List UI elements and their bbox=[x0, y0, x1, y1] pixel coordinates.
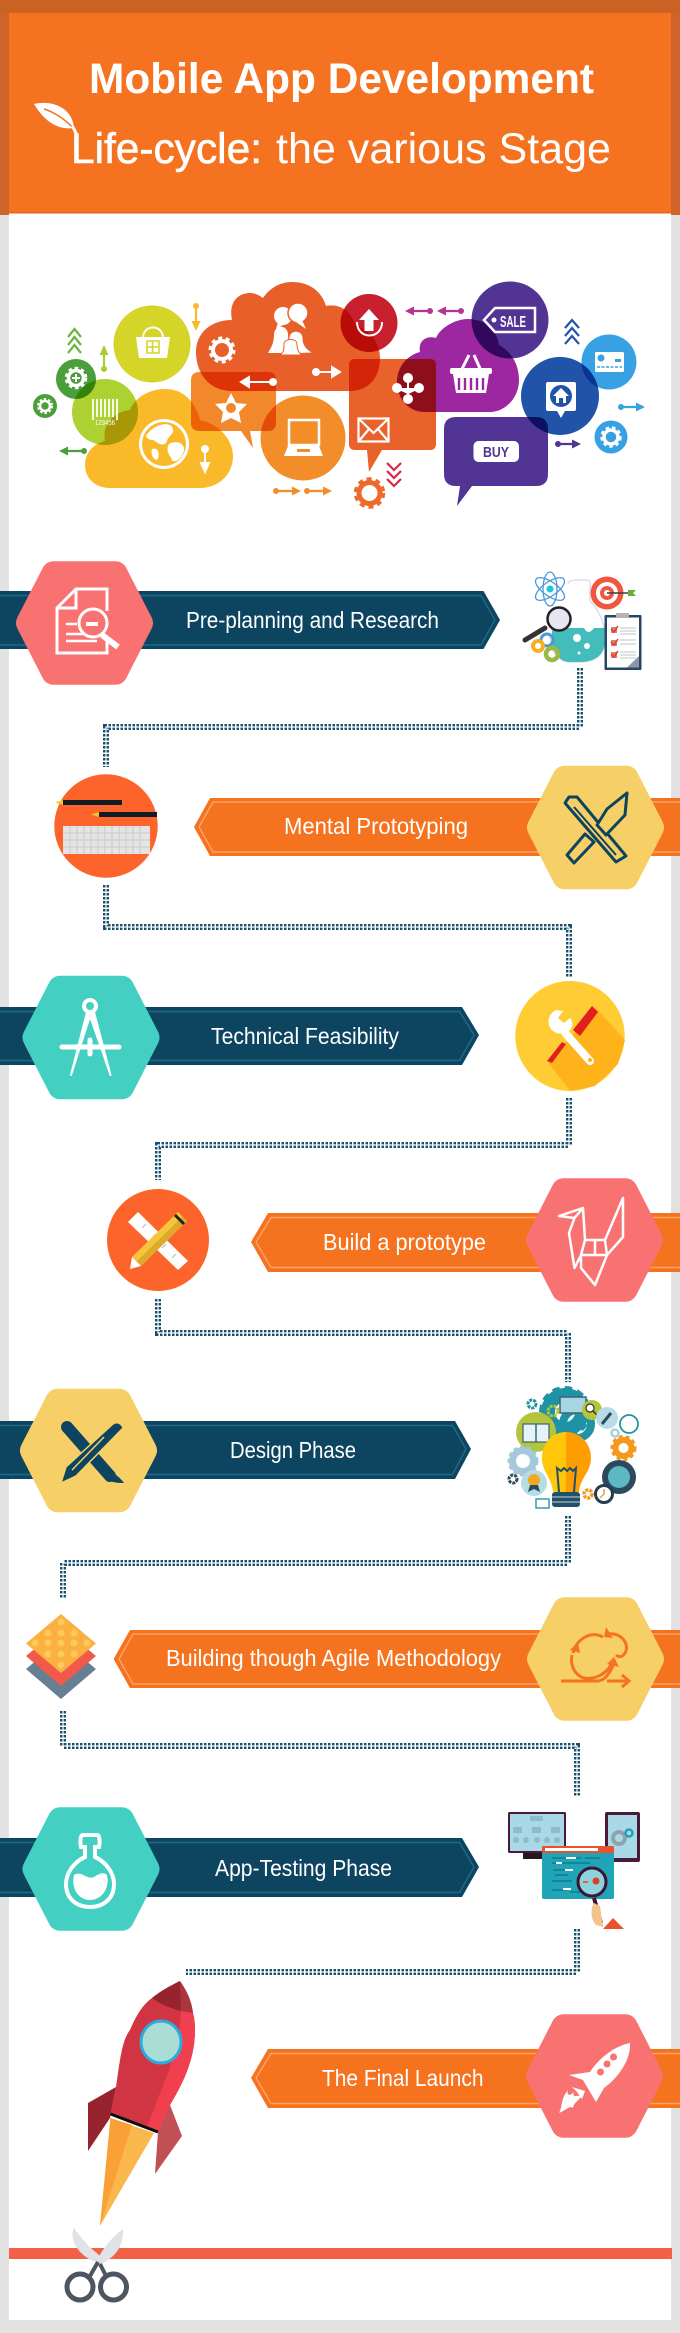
icon: blue gear bbox=[602, 428, 620, 446]
icon: envelope bbox=[358, 418, 388, 442]
icon: purple basket bbox=[450, 355, 492, 393]
hexagon: pencil and ruler bbox=[539, 778, 652, 877]
banner: app-testing phase bbox=[0, 1838, 479, 1897]
header banner bbox=[0, 0, 680, 215]
heading: the final launch: The Final Launch bbox=[322, 2065, 484, 2091]
title: Mobile App Development bbox=[89, 55, 594, 103]
decorative arrowheads bbox=[59, 303, 645, 496]
heading: technical feasibility: Technical Feasibility bbox=[211, 1023, 399, 1049]
illustration: bug testing screens bbox=[508, 1812, 640, 1929]
icon: gear in cloud bbox=[210, 338, 234, 362]
step 7: app-testing phase bbox=[0, 1812, 640, 1929]
banner: build a prototype bbox=[251, 1213, 680, 1272]
icon: orange gear bbox=[356, 479, 384, 507]
hexagon: rocket bbox=[538, 2026, 651, 2126]
icon: people bbox=[268, 303, 313, 355]
icon: star bbox=[215, 393, 247, 423]
icon: buy label bbox=[474, 441, 519, 462]
icon: buy label: BUY bbox=[483, 444, 509, 461]
icon: scissors bbox=[67, 2228, 126, 2300]
hexagon: research document bbox=[28, 573, 141, 673]
hexagon: origami crane bbox=[538, 1190, 651, 1290]
step 6: building through agile methodology bbox=[26, 1609, 680, 1709]
hexagon: pencil and brush bbox=[32, 1401, 145, 1500]
banner: agile methodology bbox=[114, 1630, 680, 1688]
illustration: wrench and screwdriver bbox=[515, 981, 625, 1091]
illustration: stacked layers bbox=[26, 1614, 96, 1699]
step 2: mental prototyping bbox=[54, 774, 680, 878]
step 1: pre-planning and research bbox=[0, 572, 642, 673]
icon: card bbox=[595, 352, 624, 372]
illustration: keyboard and pencils bbox=[54, 774, 158, 878]
cloud and bubble shapes bbox=[33, 282, 636, 506]
icon: leaf bbox=[34, 103, 77, 140]
banner: the final launch bbox=[251, 2049, 680, 2108]
icon: research cluster bbox=[525, 572, 642, 670]
icon: sale tag bbox=[484, 308, 535, 332]
step 8: the final launch bbox=[9, 1981, 680, 2300]
hexagon: compass bbox=[34, 988, 148, 1087]
connector 1 bbox=[106, 668, 580, 767]
icon: globe bbox=[139, 419, 189, 469]
banner: technical feasibility bbox=[0, 1007, 479, 1065]
connector 6 bbox=[63, 1711, 577, 1796]
icon: house pin bbox=[546, 382, 576, 418]
connector 7 bbox=[186, 1929, 577, 1972]
icon: shopping basket bbox=[136, 328, 170, 358]
connector 4 bbox=[158, 1299, 568, 1382]
banner: design phase bbox=[0, 1421, 471, 1479]
icon: barcode bbox=[93, 399, 117, 427]
connector 5 bbox=[63, 1516, 568, 1599]
title: the various Stage bbox=[276, 125, 611, 173]
icon: upload bbox=[357, 309, 382, 336]
title bbox=[71, 55, 611, 173]
icon: laptop bbox=[284, 420, 323, 456]
title: Life-cycle: bbox=[71, 125, 262, 173]
banner: mental prototyping bbox=[194, 798, 680, 856]
illustration: lightbulb and gears bbox=[509, 1389, 638, 1508]
step 3: technical feasibility bbox=[0, 981, 625, 1091]
banner: pre-planning bbox=[0, 591, 500, 649]
connector 2 bbox=[106, 885, 569, 977]
icon: white arrows bbox=[201, 367, 340, 472]
heading: building though agile methodology: Building though Agile Methodology bbox=[166, 1645, 501, 1671]
illustration: ruler and pencil bbox=[107, 1189, 209, 1291]
heading: build a prototype: Build a prototype bbox=[323, 1229, 486, 1255]
heading: app-testing phase: App-Testing Phase bbox=[215, 1855, 392, 1881]
heading: design phase: Design Phase bbox=[230, 1437, 356, 1463]
icon: sale tag: SALE bbox=[500, 314, 526, 331]
ribbon bbox=[9, 2248, 672, 2259]
icon: green gears bbox=[38, 368, 86, 413]
step 5: design phase bbox=[0, 1389, 638, 1508]
hero graphic: app marketing icons bbox=[33, 282, 645, 507]
decorative arrows and chevrons bbox=[62, 308, 641, 491]
icon: share nodes bbox=[392, 373, 424, 404]
connector 3 bbox=[158, 1098, 569, 1180]
hexagon: flask bbox=[34, 1819, 148, 1919]
step 4: build a prototype bbox=[107, 1189, 680, 1291]
hexagon: agile loop bbox=[539, 1609, 652, 1709]
heading: pre-planning and research: Pre-planning and Research bbox=[186, 607, 439, 633]
icon: barcode: 123456 bbox=[95, 420, 115, 427]
heading: mental prototyping: Mental Prototyping bbox=[284, 813, 468, 839]
illustration: large rocket bbox=[88, 1981, 195, 2226]
